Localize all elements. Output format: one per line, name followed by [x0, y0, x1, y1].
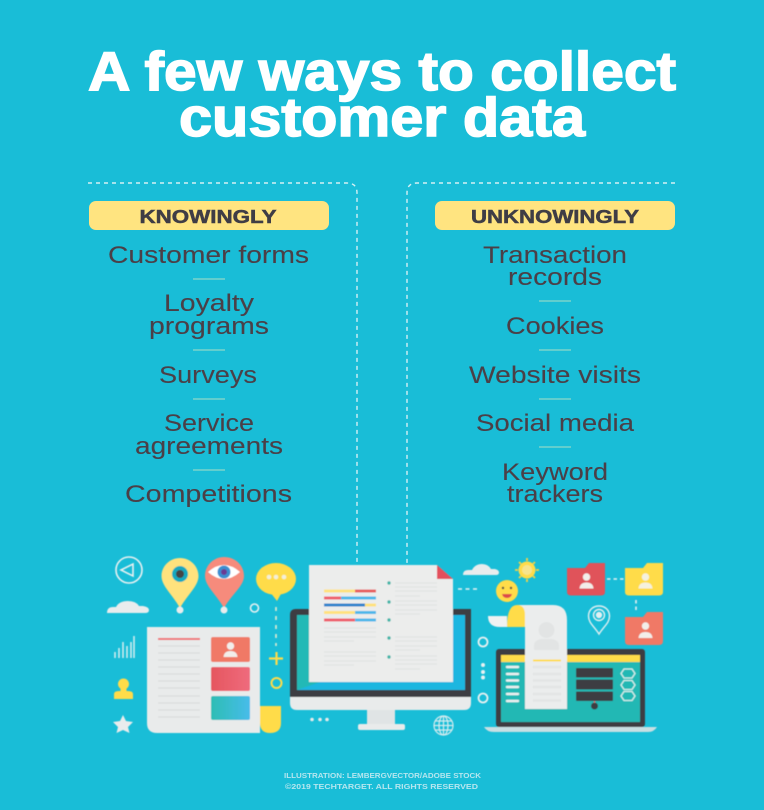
panel: knowingly: [89, 201, 329, 508]
monitor: [290, 609, 471, 730]
credit text: ILLUSTRATION: LEMBERGVECTOR/ADOBE STOCK: [284, 773, 481, 780]
icon: speech bubble: [256, 563, 296, 601]
icon: yellow person: [114, 678, 133, 699]
title: A few ways to collect: [88, 40, 676, 102]
icon: salmon folder: [625, 612, 663, 645]
list: unknowingly methods: Social media: [476, 410, 635, 437]
list: knowingly methods: [108, 242, 309, 508]
title: [88, 40, 676, 148]
icon: outlined pin: [588, 606, 610, 634]
receipt scroll with profile: [488, 605, 567, 709]
icon: smiley: [496, 580, 518, 602]
credit text: [284, 773, 481, 791]
connector: folder links: [607, 579, 636, 613]
icon: back arrow circle: [116, 557, 142, 583]
paper report with coloured bars: [309, 565, 453, 682]
connector: right dashed line: [407, 183, 675, 565]
credit text: ©2019 TECHTARGET. ALL RIGHTS RESERVED: [285, 783, 478, 791]
list: unknowingly methods: [469, 242, 641, 508]
list: knowingly methods: Customer forms: [108, 242, 309, 269]
list: knowingly methods: Loyalty: [164, 290, 254, 317]
icon: yellow folder: [625, 563, 663, 596]
laptop: [484, 649, 657, 732]
list: unknowingly methods: Cookies: [506, 313, 604, 340]
icon: small ring: [250, 604, 258, 612]
connector: left dashed line: [88, 183, 357, 565]
icon: cloud left: [107, 601, 149, 613]
list: unknowingly methods: trackers: [507, 481, 603, 508]
document with profile cards: [147, 627, 281, 733]
heading pill: unknowingly: [435, 201, 675, 230]
icon: sun: [515, 558, 539, 582]
icon: cloud right: [463, 564, 499, 575]
list: knowingly methods: programs: [149, 313, 269, 340]
icon: star: [113, 715, 133, 733]
heading pill: unknowingly: UNKNOWINGLY: [471, 207, 639, 227]
icon: dashed link to smiley: [458, 588, 478, 590]
icon: rings and dots: [478, 638, 488, 702]
list: knowingly methods: Surveys: [159, 362, 257, 389]
list: unknowingly methods: Keyword: [502, 459, 608, 486]
icon: salmon eye pin: [205, 557, 244, 614]
heading pill: knowingly: [89, 201, 329, 230]
list: knowingly methods: Service: [164, 410, 254, 437]
panel: unknowingly: [435, 201, 675, 508]
connector: dashed vertical with plus and ring: [269, 607, 283, 688]
icon: red folder: [567, 563, 605, 596]
icon: globe: [434, 716, 453, 735]
list: unknowingly methods: Website visits: [469, 362, 641, 389]
heading pill: knowingly: KNOWINGLY: [140, 207, 276, 227]
icon: yellow location pin: [162, 558, 198, 614]
list: knowingly methods: agreements: [135, 433, 283, 460]
title: customer data: [179, 86, 585, 148]
list: knowingly methods: Competitions: [125, 481, 292, 508]
list: unknowingly methods: records: [508, 264, 602, 291]
icon: bar chart: [115, 636, 134, 658]
list: unknowingly methods: Transaction: [483, 242, 627, 269]
illustration: data collection devices and icons: [107, 557, 663, 735]
